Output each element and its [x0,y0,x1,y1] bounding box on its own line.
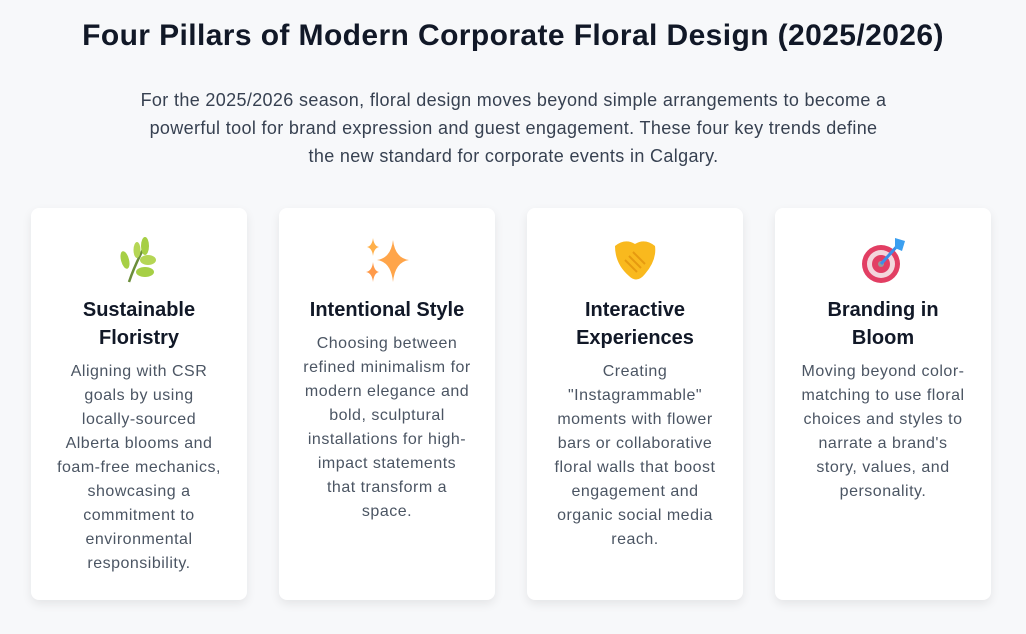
heading: Sustainable Floristry [83,299,195,349]
intro text: For the 2025/2026 season, floral design moves beyond simple arrangements to become a powerful tool for brand expression and guest engagement. These four key trends define the new standard for corporate events in Calgary. [141,90,886,166]
card: interactive experiences [527,208,743,600]
heading: Branding in Bloom [827,299,939,349]
icon: sparkles [366,238,409,282]
card: branding in bloom [775,208,991,600]
title: Four Pillars of Modern Corporate Floral Design (2025/2026) [82,19,944,52]
card: intentional style [279,208,495,600]
body: Choosing between refined minimalism for modern elegance and bold, sculptural installations for high-impact statements that transform a space. [303,335,471,520]
body: Creating "Instagrammable" moments with flower bars or collaborative floral walls that boost engagement and organic social media reach. [555,363,715,548]
heading: Intentional Style [310,299,464,321]
card: sustainable floristry [31,208,247,600]
icon: handshake [615,241,656,280]
icon: leaf branch [120,237,156,282]
body: Moving beyond color-matching to use floral choices and styles to narrate a brand's story, values, and personality. [801,363,965,500]
heading: Interactive Experiences [576,299,694,349]
icon: target [862,238,905,283]
body: Aligning with CSR goals by using locally-sourced Alberta blooms and foam-free mechanics, showcasing a commitment to environmental responsibility. [57,363,221,572]
